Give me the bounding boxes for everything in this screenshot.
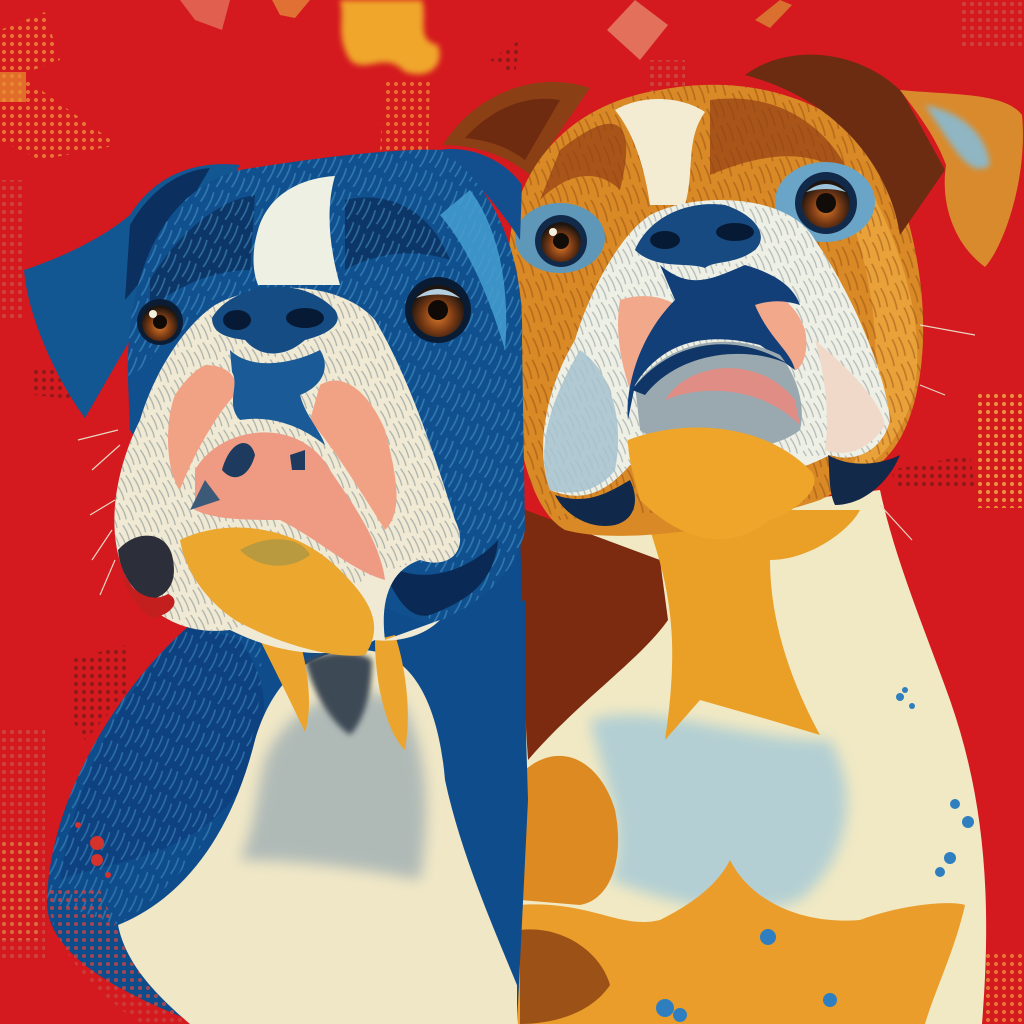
orange dog: lip left [555, 480, 635, 526]
orange dog: blue nose bridge [628, 265, 800, 420]
orange dog: blue chest shading [590, 714, 847, 910]
blue dog: muzzle [114, 288, 460, 653]
blue dog: red splatter [75, 822, 111, 878]
blue dog: chest grey shade [240, 692, 426, 880]
blue dog: jowl pink right [310, 381, 397, 530]
blue dog: body fur texture [47, 625, 261, 925]
orange dog: head fur texture [509, 85, 923, 520]
orange dog: eye surrounds [515, 203, 605, 273]
orange dog: brown belly tufts [520, 929, 610, 1024]
blue dog: blue nose bridge [230, 350, 325, 445]
blue dog: head dark shading [150, 195, 450, 310]
blue dog: head [128, 150, 525, 625]
orange dog: right eye [795, 172, 857, 234]
blue dog: neck orange folds [245, 610, 408, 750]
orange dog: left chest patch [520, 756, 618, 905]
orange dog: dark chest shadow [512, 505, 668, 760]
blue dog: lower jaw shadow [380, 540, 498, 616]
orange dog: left ear [443, 82, 590, 175]
orange dog: chin orange [628, 428, 814, 539]
blue dog: right ear [440, 149, 522, 240]
orange dog: ear blue highlight [925, 105, 990, 169]
blue dog: body [47, 530, 528, 1024]
orange dog: nose [635, 204, 761, 268]
blue dog: head fur texture [128, 150, 525, 625]
blue dog: head highlight [440, 190, 506, 350]
orange dog: jowl pink [618, 296, 690, 390]
blue dog [24, 149, 528, 1024]
orange dog [443, 55, 1023, 1024]
blue dog: chin pink [195, 432, 385, 580]
background: orange paint splash [340, 0, 440, 74]
blue dog: left lip dark [118, 536, 174, 600]
blue dog: chin yellow [180, 528, 374, 656]
blue dog: chin spots [222, 443, 305, 477]
blue dog: left eye [137, 299, 183, 345]
blue dog: whiskers [78, 430, 120, 595]
blue dog: halftone lower body [47, 890, 190, 1024]
blue dog: nose [212, 287, 338, 354]
orange dog: left eye [535, 215, 587, 267]
blue dog: muzzle fur texture [114, 288, 460, 631]
orange dog: mouth and chin [635, 342, 802, 451]
orange dog: right ear [745, 55, 945, 235]
blue dog: blue stripe right of chest [420, 600, 526, 985]
blue dog: dark body shading [60, 625, 264, 880]
blue dog: right eye [405, 277, 471, 343]
orange dog: blue splatter [656, 687, 974, 1022]
blue dog: jowl pink left [168, 365, 236, 490]
orange dog: brow shading [540, 98, 850, 200]
blue dog: neck dark shade [305, 652, 372, 735]
orange dog: jowl shadow left [544, 350, 618, 493]
blue dog: left lip red [122, 572, 175, 618]
orange dog: lower orange patch [518, 860, 965, 1024]
orange dog: head right shading [840, 170, 917, 470]
blue dog: ear [24, 164, 240, 418]
blue dog: chest cream [118, 650, 517, 1024]
orange dog: neck fold orange [640, 510, 860, 740]
orange dog: muzzle [543, 200, 890, 496]
orange dog: head [509, 85, 923, 536]
orange dog: white blaze [615, 99, 705, 205]
orange dog: whiskers right [880, 325, 975, 540]
orange dog: body [515, 490, 986, 1024]
blue dog: white blaze [254, 176, 340, 285]
orange dog: muzzle fur texture [543, 200, 890, 496]
orange dog: lip right [828, 455, 900, 505]
